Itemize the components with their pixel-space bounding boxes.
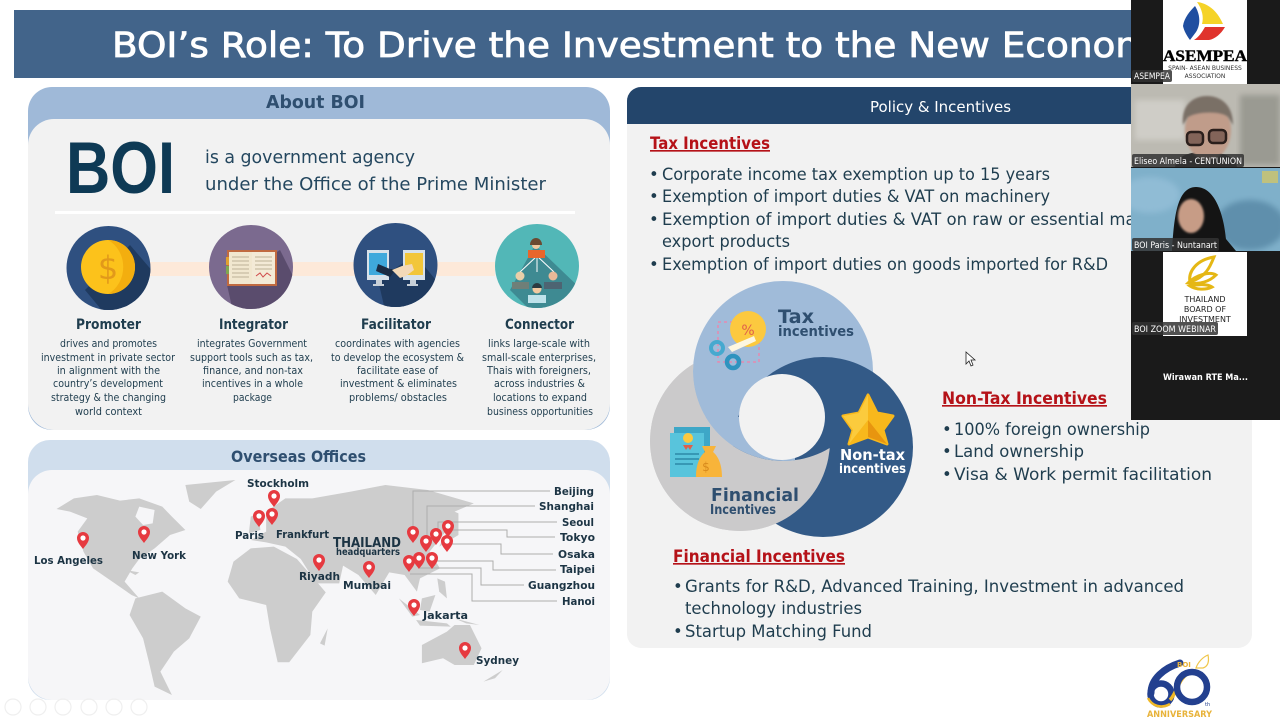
icon: promoter coin — [66, 226, 150, 310]
tax incentives list: • — [649, 165, 659, 184]
label: tax incentives: incentives — [778, 324, 854, 340]
tile: ASEMPEA logo — [1132, 0, 1247, 84]
non-tax incentives list: • — [942, 420, 952, 439]
city labels: Guangzhou — [528, 579, 595, 592]
icon: mouse cursor — [966, 352, 975, 366]
label: non-tax incentives: incentives — [839, 462, 906, 477]
non-tax incentives list: • — [942, 442, 952, 461]
label: financial incentives: Incentives — [710, 503, 776, 518]
role: connector: locations to expand — [493, 391, 587, 404]
label: tax incentives — [778, 306, 854, 340]
role: connector: links large-scale with — [488, 337, 590, 350]
tax incentives list: Corporate income tax exemption up to 15 years — [662, 165, 1050, 184]
label: non-tax incentives — [839, 446, 906, 477]
role: promoter: country’s development — [53, 377, 164, 390]
role: promoter: Promoter — [76, 317, 141, 333]
tax incentives list: Exemption of import duties on goods imported for R&D — [662, 255, 1108, 274]
role: integrator — [190, 317, 313, 404]
city labels: Osaka — [558, 548, 595, 561]
role: integrator: finance, and non-tax — [203, 364, 303, 377]
city labels: Sydney — [476, 654, 519, 667]
role: facilitator: problems/ obstacles — [349, 391, 447, 404]
financial incentives list: technology industries — [685, 599, 862, 618]
role: connector: across industries & — [494, 377, 585, 390]
name tag: ASEMPEA: ASEMPEA — [1134, 72, 1170, 82]
non-tax incentives list: Land ownership — [954, 442, 1084, 461]
city labels: Stockholm — [247, 477, 309, 490]
role: promoter: strategy & the changing — [51, 391, 166, 404]
icon: connector people — [495, 224, 582, 310]
role: promoter: world context — [75, 405, 143, 418]
city labels: THAILAND — [333, 536, 401, 551]
tile: Thailand BOI logo: THAILAND — [1184, 295, 1226, 304]
tile: Thailand BOI logo: INVESTMENT — [1179, 315, 1231, 324]
label: tax incentives: Tax — [778, 306, 814, 328]
BOI wordmark: BOI — [66, 128, 175, 209]
icon: scissors and percent — [711, 311, 766, 368]
tax incentives list: • — [649, 255, 659, 274]
agency description: is a government agency — [205, 147, 415, 168]
role: integrator: package — [233, 391, 272, 404]
financial incentives list: • — [673, 577, 683, 596]
panel: video participants sidebar — [1120, 0, 1280, 420]
heading: overseas offices: Overseas Offices — [231, 447, 366, 466]
role: promoter: drives and promotes — [60, 337, 157, 350]
tax incentives list: Exemption of import duties & VAT on machinery — [662, 187, 1050, 206]
name tag: Nuntanart: BOI Paris - Nuntanart — [1134, 241, 1218, 251]
tile: ASEMPEA logo: SPAIN- ASEAN BUSINESS — [1168, 65, 1242, 72]
icon: facilitator handshake — [354, 223, 440, 310]
city labels — [34, 477, 595, 667]
role: facilitator: Facilitator — [361, 317, 431, 333]
logo: BOI 60th anniversary: BOI — [1177, 661, 1191, 669]
financial incentives list: Startup Matching Fund — [685, 622, 872, 641]
icon: integrator book — [209, 225, 293, 309]
role: facilitator: coordinates with agencies — [335, 337, 460, 350]
agency description: under the Office of the Prime Minister — [205, 174, 547, 195]
logo: BOI 60th anniversary: ANNIVERSARY — [1147, 710, 1213, 720]
heading: policy and incentives: Policy & Incentives — [870, 98, 1011, 116]
city labels: Los Angeles — [34, 554, 103, 567]
tax incentives list: • — [649, 210, 659, 229]
role: promoter — [41, 317, 175, 418]
tile: ASEMPEA logo: ASSOCIATION — [1185, 73, 1225, 80]
tax incentives list — [649, 134, 1215, 274]
icon: certificate and money bag — [670, 427, 722, 477]
logo: BOI 60th anniversary — [1147, 655, 1213, 720]
financial incentives list — [673, 547, 1184, 641]
name tag: BOI zoom webinar: BOI ZOOM WEBINAR — [1134, 325, 1216, 335]
map pins — [77, 490, 471, 659]
city labels: Tokyo — [560, 531, 595, 544]
icon: promoter coin: $ — [98, 249, 118, 287]
city labels: Frankfurt — [276, 528, 329, 541]
leader lines — [410, 491, 557, 601]
incentives swirl diagram — [650, 281, 913, 537]
heading: about BOI: About BOI — [266, 92, 365, 113]
tile: Wirawan name: Wirawan RTE Ma... — [1163, 373, 1248, 383]
city labels: Seoul — [562, 516, 594, 529]
tax incentives list: Tax Incentives — [650, 134, 770, 153]
panel: overseas offices — [28, 440, 610, 700]
city labels: Riyadh — [299, 570, 340, 583]
non-tax incentives list: Visa & Work permit facilitation — [954, 465, 1212, 484]
non-tax incentives list — [942, 389, 1212, 484]
connector band — [150, 262, 495, 276]
role: facilitator: to develop the ecosystem & — [331, 351, 464, 364]
city labels: headquarters — [336, 547, 400, 558]
non-tax incentives list: • — [942, 465, 952, 484]
name tag: Eliseo: Eliseo Almela - CENTUNION — [1134, 157, 1242, 167]
presentation toolbar — [5, 699, 147, 715]
icon: scissors and percent: % — [741, 323, 755, 339]
financial incentives list: Grants for R&D, Advanced Training, Investment in advanced — [685, 577, 1184, 596]
label: financial incentives — [710, 485, 799, 518]
city labels: Taipei — [560, 563, 595, 576]
non-tax incentives list: 100% foreign ownership — [954, 420, 1150, 439]
city labels: Mumbai — [343, 579, 391, 592]
city labels: Hanoi — [562, 595, 595, 608]
tile: ASEMPEA logo: ASEMPEA — [1163, 48, 1247, 65]
agency description — [205, 147, 547, 195]
role: connector: business opportunities — [487, 405, 593, 418]
role: connector: small-scale enterprises, — [482, 351, 596, 364]
tax incentives list: Exemption of import duties & VAT on raw or essential materials for — [662, 210, 1215, 229]
tile: Thailand BOI logo: BOARD OF — [1184, 305, 1226, 314]
tile: Eliseo Almela video — [1131, 84, 1280, 167]
city labels: Beijing — [554, 485, 594, 498]
role headings and descriptions — [41, 317, 596, 418]
tile: Thailand BOI logo — [1132, 252, 1247, 336]
role: promoter: investment in private sector — [41, 351, 175, 364]
logo: BOI 60th anniversary: th — [1205, 702, 1210, 708]
label: financial incentives: Financial — [711, 485, 799, 506]
role: integrator: incentives in a whole — [202, 377, 303, 390]
panel: policy and incentives — [627, 87, 1252, 648]
world map — [57, 480, 503, 695]
title banner: BOI’s Role: To Drive the Investment to the New Economy — [112, 26, 1174, 66]
role: integrator: integrates Government — [197, 337, 308, 350]
tax incentives list: • — [649, 187, 659, 206]
financial incentives list: • — [673, 622, 683, 641]
financial incentives list: Financial Incentives — [673, 547, 845, 566]
role: integrator: support tools such as tax, — [190, 351, 313, 364]
city labels: Paris — [235, 529, 264, 542]
role: connector — [482, 317, 596, 418]
tile: BOI Paris Nuntanart video — [1120, 168, 1280, 251]
role: connector: Connector — [505, 317, 574, 333]
role: promoter: in alignment with the — [57, 364, 160, 377]
role: facilitator: investment & eliminates — [340, 377, 457, 390]
role: facilitator: facilitate ease of — [357, 364, 439, 377]
city labels: Jakarta — [422, 609, 468, 622]
icon: gold star — [843, 395, 893, 444]
role: integrator: Integrator — [219, 317, 288, 333]
panel: about BOI — [28, 87, 610, 430]
tax incentives list: export products — [662, 232, 790, 251]
title banner — [14, 10, 1174, 78]
icon: certificate and money bag: $ — [702, 460, 710, 474]
city labels: New York — [132, 549, 187, 562]
non-tax incentives list: Non-Tax Incentives — [942, 389, 1107, 408]
label: non-tax incentives: Non-tax — [840, 446, 905, 464]
role: facilitator — [331, 317, 464, 404]
role: connector: Thais with foreigners, — [486, 364, 591, 377]
city labels: Shanghai — [539, 500, 594, 513]
